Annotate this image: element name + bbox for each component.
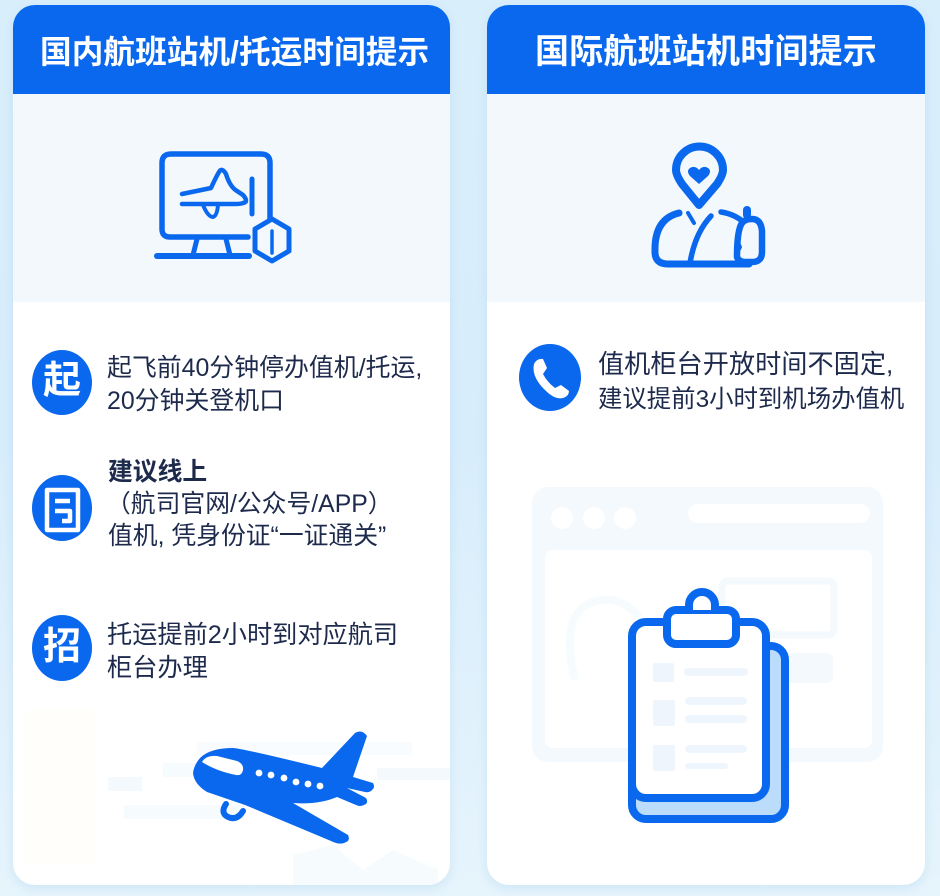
- item: departure cutoff: [32, 350, 422, 415]
- badge: 起: 起: [43, 360, 81, 402]
- heading: domestic check-in time: 国内航班站机/托运时间提示: [40, 34, 429, 70]
- illustration: clipboard checklist: [628, 588, 789, 823]
- text: online check-in advice: 值机, 凭身份证“一证通关”: [108, 523, 386, 550]
- item: counter opening: [519, 344, 904, 413]
- background: faint airport scene: [108, 763, 450, 885]
- icon: service agent with location pin and walkie-talkie: [651, 142, 766, 268]
- item: online check-in: [32, 458, 393, 550]
- text: baggage advice: 托运提前2小时到对应航司: [107, 621, 398, 649]
- text: counter times: 建议提前3小时到机场办值机: [598, 386, 904, 413]
- badge: telephone: [519, 344, 581, 411]
- text: baggage advice: 柜台办理: [107, 654, 208, 682]
- text: online check-in advice: （航司官网/公众号/APP）: [106, 491, 393, 518]
- text: baggage advice: [107, 621, 398, 682]
- text: online check-in advice: 建议线上: [108, 459, 207, 486]
- badge: 招: 招: [43, 626, 81, 668]
- background: faint browser window: [532, 487, 883, 762]
- heading: international check-in time: 国际航班站机时间提示: [535, 33, 877, 71]
- panel: international flights: [487, 5, 925, 885]
- pale icon band: international: [487, 94, 925, 302]
- illustration: airplane: [193, 732, 374, 844]
- header bar: domestic: [13, 5, 450, 94]
- text: cutoff times: 起飞前40分钟停办值机/托运,: [107, 354, 422, 382]
- text: cutoff times: [107, 354, 422, 415]
- text: counter times: 值机柜台开放时间不固定,: [598, 349, 893, 379]
- badge: 招: [32, 615, 92, 681]
- pale icon band: domestic: [13, 94, 450, 302]
- panel: domestic flights: [13, 5, 450, 885]
- item: baggage check: [32, 615, 398, 682]
- text: online check-in advice: [106, 458, 393, 550]
- text: counter times: [598, 349, 904, 413]
- icon: monitor with plane and shield: [154, 151, 292, 264]
- text: cutoff times: 20分钟关登机口: [107, 387, 284, 415]
- badge: 起: [32, 350, 92, 415]
- badge: document icon: [32, 475, 92, 541]
- header bar: international: [487, 5, 925, 94]
